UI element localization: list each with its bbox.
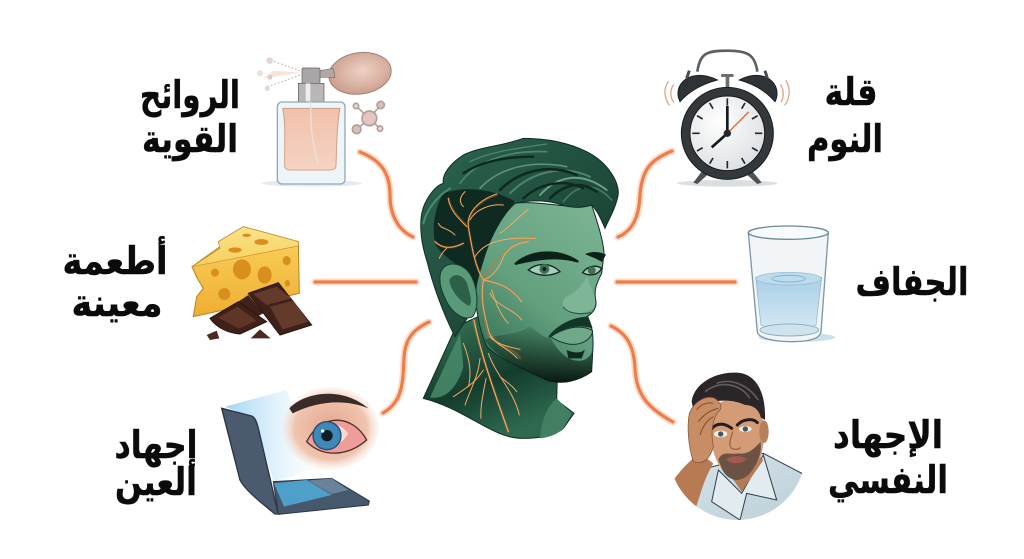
- dark temple hair: [434, 189, 515, 287]
- arrow: middle-right connector: [617, 278, 735, 286]
- neck: [722, 457, 763, 492]
- clock body: [681, 87, 773, 179]
- label: certain foods: أطعمة: [62, 236, 168, 283]
- label: strong scents: [140, 73, 240, 161]
- label: eye strain: [114, 423, 198, 504]
- label: psychological stress: النفسي: [828, 458, 948, 502]
- label: lack of sleep: قلة: [824, 70, 878, 114]
- central head illustration: [421, 138, 618, 438]
- mouth: [726, 456, 747, 463]
- beard: [718, 442, 761, 480]
- face: [708, 399, 764, 479]
- screen light beam: [225, 390, 313, 482]
- lips: [551, 327, 593, 344]
- laptop base: [273, 478, 369, 514]
- glass bottle: [277, 102, 345, 184]
- ear: [440, 264, 477, 318]
- label: certain foods: [62, 236, 168, 325]
- label: strong scents: القوية: [142, 117, 238, 161]
- left eyebrow: [515, 252, 578, 264]
- ticks: [692, 98, 762, 168]
- icon: glass of water: [748, 226, 835, 342]
- ear: [759, 420, 769, 443]
- icon: cheese and chocolate: [192, 227, 312, 340]
- hair strands: [423, 144, 612, 223]
- hair: [692, 373, 765, 420]
- feet: [693, 172, 762, 184]
- handle: [697, 51, 757, 72]
- right eyebrow: [585, 252, 606, 262]
- molecule: [352, 101, 384, 134]
- label: dehydration: الجفاف: [856, 260, 968, 304]
- icon: alarm clock: [665, 51, 789, 187]
- label: lack of sleep: [807, 70, 883, 162]
- label: psychological stress: الإجهاد: [833, 413, 943, 457]
- eyebrow: [289, 394, 368, 413]
- cheese wedge: [192, 227, 299, 317]
- glass body: [748, 233, 828, 342]
- laptop lid: [222, 408, 278, 514]
- shirt and arm: [674, 452, 802, 520]
- nose: [730, 432, 741, 449]
- keyboard: [274, 480, 332, 507]
- nerve glow: [435, 195, 533, 432]
- left eye: [528, 265, 560, 275]
- atomizer bulb: [326, 49, 394, 98]
- iris: [313, 422, 341, 450]
- chocolate pieces: [238, 295, 263, 318]
- arrow: bottom-left connector: [383, 322, 429, 413]
- label: certain foods: معينة: [72, 281, 162, 325]
- right eye: [583, 266, 602, 275]
- arrow: middle-left connector: [315, 278, 416, 286]
- icon: laptop and strained eye: [222, 387, 379, 514]
- neck and shoulders: [423, 317, 574, 438]
- water: [756, 277, 822, 329]
- arrow: top-right connector: [618, 151, 672, 237]
- nose: [563, 277, 595, 313]
- cheese holes: [211, 234, 291, 300]
- arrow: bottom-right connector: [611, 326, 673, 422]
- face: [475, 203, 604, 382]
- arrow: top-left connector: [360, 152, 413, 237]
- icon: stressed man: [674, 372, 802, 520]
- spray mist: [257, 57, 301, 91]
- label: lack of sleep: النوم: [807, 117, 883, 162]
- bells: [678, 75, 717, 102]
- nozzle and collar: [302, 68, 320, 84]
- eyes and brows: [711, 420, 757, 430]
- icon: perfume bottle: [257, 49, 394, 187]
- hair: [421, 138, 618, 337]
- label: eye strain: العين: [115, 460, 197, 504]
- eye skin: [282, 387, 379, 470]
- label: eye strain: إجهاد: [114, 423, 198, 468]
- hands: [723, 106, 731, 134]
- label: psychological stress: [828, 413, 948, 502]
- hand on forehead: [688, 397, 721, 463]
- label: strong scents: الروائح: [140, 73, 240, 118]
- beard and jaw shadow: [485, 327, 592, 383]
- nerve branches: [435, 192, 535, 432]
- infographic canvas: [64, 49, 966, 520]
- ringing marks: [665, 81, 789, 105]
- eyeball: [307, 420, 367, 453]
- glass rim: [748, 226, 828, 239]
